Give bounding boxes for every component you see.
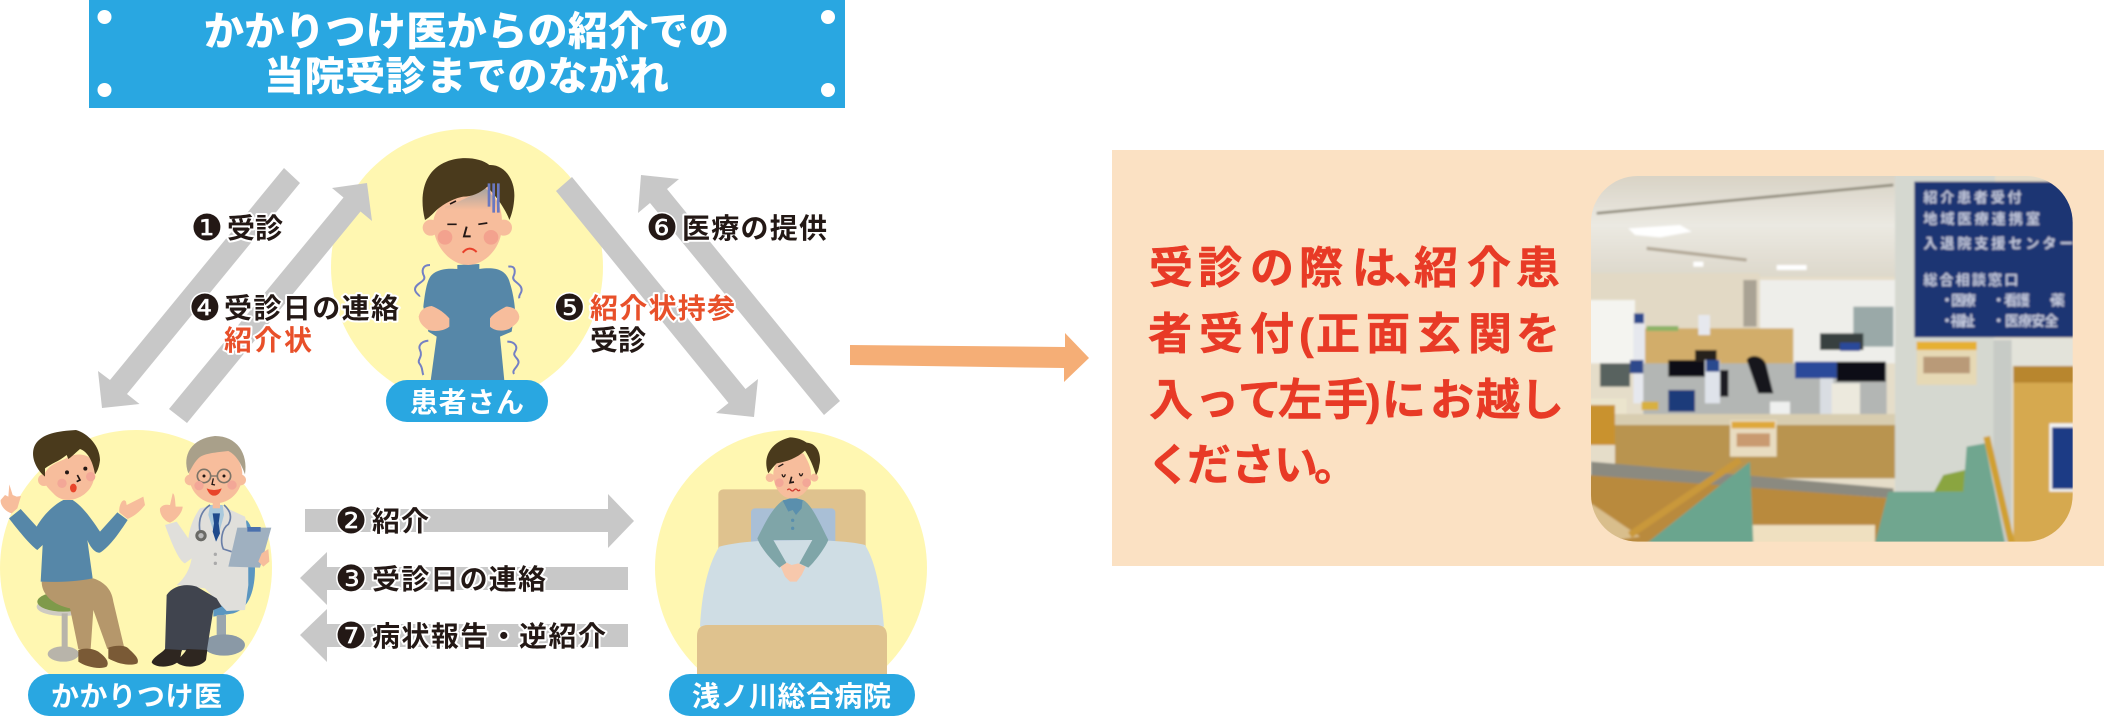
- arrow 7: hospital to doctor: [300, 609, 628, 662]
- reception instructions text: 入って左手)にお越し: [1149, 376, 1564, 425]
- step 7 label: ❼: [335, 616, 367, 657]
- pill label: family doctor: [28, 674, 244, 716]
- step 5 label: ❺: [553, 288, 586, 329]
- step 1 label: 受診: [227, 213, 283, 244]
- photo: reception counter: ・看護: [1992, 292, 2030, 308]
- man's sweater: [9, 500, 128, 582]
- doctor's head: [185, 436, 246, 508]
- man's stool: [37, 592, 90, 662]
- doctor's coat: [165, 505, 248, 611]
- icon: shivering patient: [415, 158, 522, 381]
- man's shoes: [78, 646, 138, 668]
- step 1 label: [191, 208, 283, 249]
- step 2 label: [335, 501, 429, 542]
- doctor's chair: [189, 520, 255, 656]
- arrow 4: family doctor to patient: [169, 183, 372, 423]
- arrow 5: patient to hospital: [556, 177, 758, 417]
- photo: reception counter: ・医療: [1940, 292, 1976, 308]
- orange arrow to reception panel: [850, 333, 1089, 382]
- doctor yellow circle: [0, 430, 272, 706]
- man's trousers: [42, 578, 124, 649]
- pill label: hospital: 浅ノ川総合病院: [692, 681, 891, 712]
- reception instructions text: 者受付(正面玄関を: [1148, 310, 1560, 359]
- doctor's trousers: [165, 585, 222, 652]
- doctor's shirt and tie: [208, 505, 224, 542]
- arrow 6: hospital to patient: [638, 175, 840, 415]
- step 5 label: 紹介状持参: [590, 293, 735, 324]
- hospital yellow circle: [655, 430, 927, 706]
- photo: reception counter: 紹介患者受付: [1923, 190, 2022, 206]
- man's hands: [1, 484, 145, 519]
- pill label: patient: 患者さん: [410, 387, 524, 418]
- step 4 label: [189, 288, 399, 356]
- headboard, pillow and man: [700, 437, 884, 627]
- step 2 label: 紹介: [372, 506, 429, 537]
- step 4 label: 紹介状: [224, 325, 312, 356]
- step 3 label: ❸: [335, 559, 367, 600]
- footboard: [697, 625, 887, 676]
- step 3 label: [335, 559, 546, 600]
- patient yellow circle: [331, 129, 603, 405]
- reception instructions text: 受診の際は、紹介患: [1149, 244, 1560, 293]
- photo: reception counter: ・薬: [2045, 292, 2065, 308]
- pill label: hospital: [669, 674, 915, 716]
- step 1 label: ❶: [191, 208, 223, 249]
- step 6 label: ❻: [646, 208, 678, 249]
- photo: reception counter: ・福祉: [1940, 313, 1975, 329]
- reception info panel: [1112, 150, 2104, 566]
- photo: reception counter: 入退院支援センター: [1923, 235, 2073, 251]
- stethoscope: [195, 505, 232, 552]
- clipboard: [228, 527, 271, 568]
- step 3 label: 受診日の連絡: [372, 564, 546, 595]
- icon: family doctor consultation: [1, 430, 271, 668]
- title banner: かかりつけ医からの紹介での: [204, 10, 729, 54]
- step 6 label: [646, 208, 827, 249]
- step 2 label: ❷: [335, 501, 367, 542]
- step 7 label: [335, 616, 606, 657]
- photo: reception counter: 総合相談窓口: [1923, 272, 2018, 288]
- reception instructions text: ください。: [1147, 441, 1358, 490]
- step 4 label: ❹: [189, 288, 221, 329]
- step 5 label: 受診: [590, 325, 646, 356]
- reception instructions text: [1147, 244, 1564, 490]
- photo: reception counter: [1587, 173, 2078, 546]
- pill label: patient: [386, 380, 548, 422]
- pill label: family doctor: かかりつけ医: [51, 681, 222, 712]
- arrow 3: hospital to doctor: [300, 552, 628, 605]
- doctor's shoes: [152, 649, 207, 667]
- doctor's pointing hand: [160, 493, 183, 523]
- icon: hospitalised patient in bed: [697, 437, 887, 676]
- man's head: [33, 430, 100, 500]
- title banner: 当院受診までのながれ: [264, 54, 669, 99]
- step 7 label: 病状報告・逆紹介: [372, 621, 606, 652]
- step 6 label: 医療の提供: [682, 213, 827, 244]
- arrow 2: doctor to hospital: [305, 494, 634, 548]
- step 4 label: 受診日の連絡: [224, 293, 399, 324]
- photo: reception counter: ・医療安全: [1992, 313, 2058, 329]
- title banner: [89, 0, 845, 108]
- arrow 1: patient to family doctor: [98, 168, 300, 408]
- step 5 label: [553, 288, 735, 356]
- photo: reception counter: 地域医療連携室: [1923, 211, 2040, 227]
